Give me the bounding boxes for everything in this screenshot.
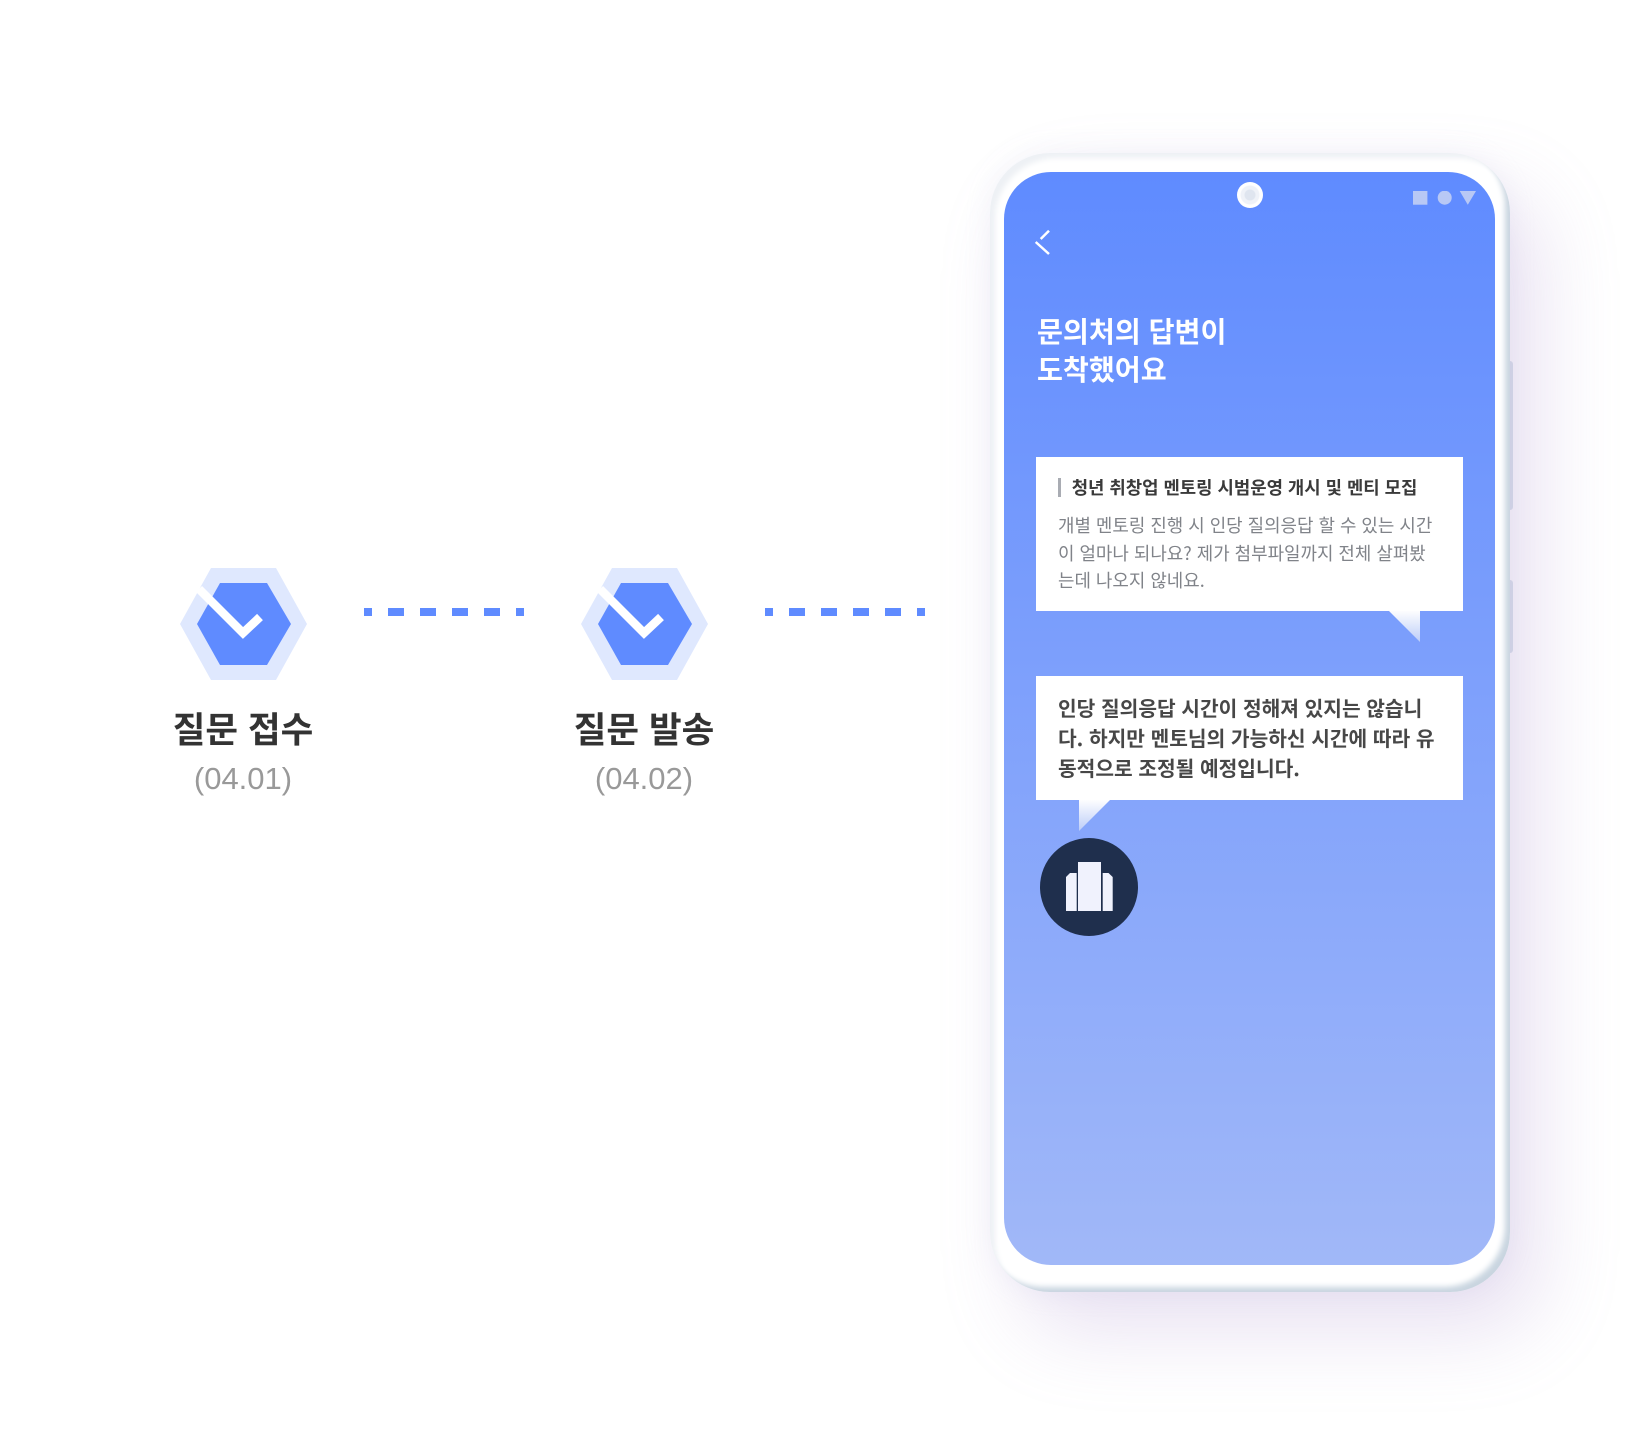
- question body: [1058, 512, 1432, 593]
- screen heading: 도착했어요: [1037, 348, 1167, 389]
- label: step 1 date: (04.01): [194, 761, 292, 796]
- label: step 2 title: 질문 발송: [574, 702, 714, 753]
- label: step 2 date: (04.02): [595, 761, 693, 796]
- question body: 는데 나오지 않네요.: [1058, 567, 1205, 593]
- question body: 개별 멘토링 진행 시 인당 질의응답 할 수 있는 시간: [1058, 512, 1432, 538]
- phone side button lower: [1507, 580, 1513, 653]
- question body: 이 얼마나 되나요? 제가 첨부파일까지 전체 살펴봤: [1058, 540, 1426, 566]
- step 1: question received: [173, 568, 313, 796]
- phone mockup: [984, 150, 1562, 1354]
- avatar: building icon: [1040, 838, 1138, 936]
- status icons: [1413, 191, 1476, 205]
- screen heading: [1037, 310, 1226, 389]
- dotted connector 2: [765, 608, 925, 616]
- step 2: question sent: [574, 568, 714, 796]
- camera: [1236, 182, 1262, 208]
- bubble box: [1036, 457, 1463, 611]
- bubble tail: [1079, 800, 1110, 831]
- speech bubble: answer: [1036, 676, 1463, 831]
- dotted connector 1: [364, 608, 524, 616]
- screen heading: 문의처의 답변이: [1037, 310, 1226, 351]
- label: step 1 title: 질문 접수: [173, 702, 313, 753]
- bubble tail: [1389, 611, 1420, 642]
- title bar marker: [1058, 478, 1061, 497]
- icon: hexagon check: [180, 568, 307, 680]
- icon: hexagon check: [581, 568, 708, 680]
- phone body frame: [990, 153, 1510, 1292]
- phone side button upper: [1507, 361, 1513, 510]
- back arrow: [1034, 230, 1050, 255]
- question title: 청년 취창업 멘토링 시범운영 개시 및 멘티 모집: [1072, 474, 1417, 500]
- answer text: 인당 질의응답 시간이 정해져 있지는 않습니: [1058, 692, 1422, 722]
- bubble box: [1036, 676, 1463, 800]
- speech bubble: question: [1036, 457, 1463, 642]
- answer text: [1058, 692, 1435, 782]
- answer text: 동적으로 조정될 예정입니다.: [1058, 752, 1300, 782]
- answer text: 다. 하지만 멘토님의 가능하신 시간에 따라 유: [1058, 722, 1435, 752]
- phone screen: [1004, 172, 1495, 1265]
